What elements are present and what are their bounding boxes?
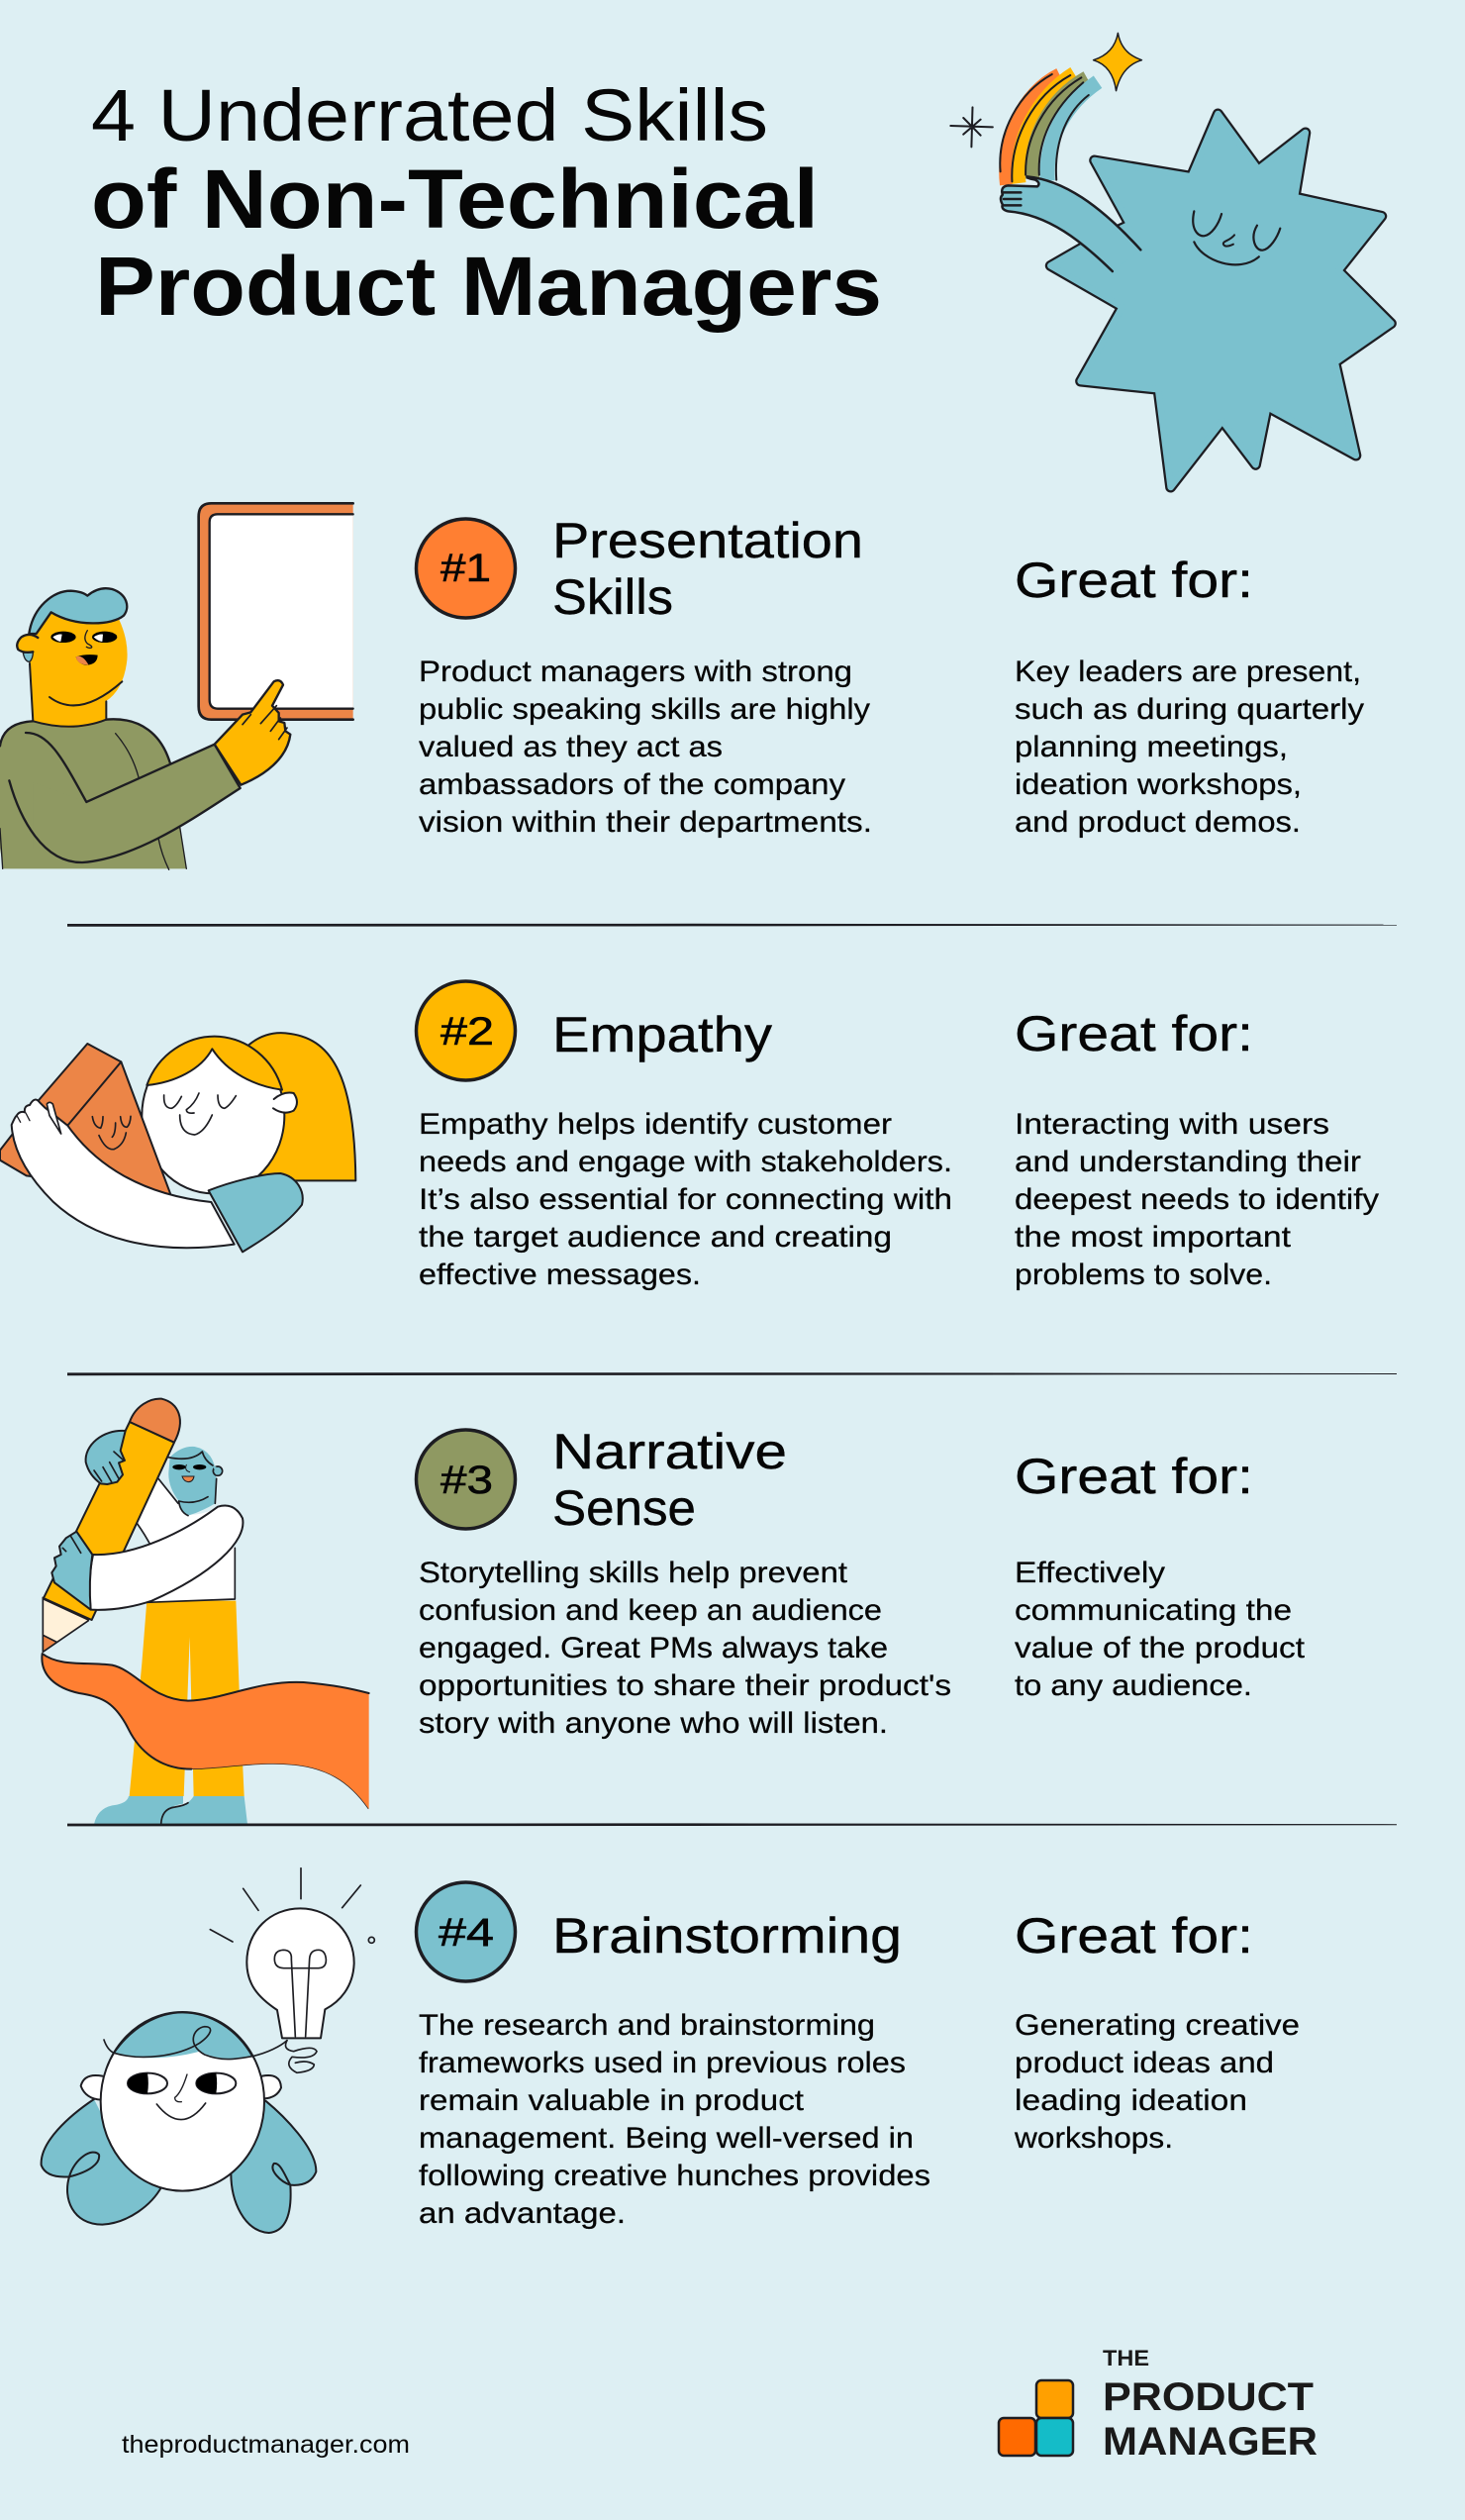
body: narrative sense: story with anyone who will listen. xyxy=(419,1707,888,1740)
body: empathy xyxy=(419,1108,952,1291)
body: brainstorming xyxy=(419,2009,930,2230)
body: brainstorming: an advantage. xyxy=(419,2197,626,2230)
body: presentation skills: Product managers with strong xyxy=(419,655,852,688)
heading: Presentation Skills: Skills xyxy=(552,569,673,625)
body: presentation skills: valued as they act as xyxy=(419,731,723,763)
logo wordmark: PRODUCT xyxy=(1103,2375,1314,2419)
heading: Presentation Skills: Presentation xyxy=(552,513,863,568)
logo wordmark xyxy=(1103,2346,1318,2464)
body: great for 2: and understanding their xyxy=(1015,1146,1361,1178)
heading: Brainstorming: Brainstorming xyxy=(552,1908,902,1964)
body: great for 4: workshops. xyxy=(1014,2122,1173,2155)
logo: The Product Manager xyxy=(999,2346,1318,2464)
heading: Great for 4: Great for: xyxy=(1015,1908,1253,1964)
body: great for 2: deepest needs to identify xyxy=(1015,1183,1379,1216)
logo wordmark: THE xyxy=(1103,2346,1149,2370)
badge 2: #2 xyxy=(440,1010,494,1054)
illustration: person with a light bulb idea xyxy=(42,1868,374,2233)
body: great for 4: Generating creative xyxy=(1015,2009,1300,2042)
heading: Narrative Sense xyxy=(552,1424,787,1536)
body: great for 4: leading ideation xyxy=(1015,2084,1247,2117)
title: 4 Underrated Skills xyxy=(91,74,768,156)
heading: Great for 3: Great for: xyxy=(1015,1449,1253,1504)
body: great for 2: problems to solve. xyxy=(1015,1259,1272,1291)
logo mark: three squares xyxy=(999,2380,1073,2456)
body: great for 1: ideation workshops, xyxy=(1015,768,1302,801)
body: great for 1: planning meetings, xyxy=(1015,731,1288,763)
body: great for 1: such as during quarterly xyxy=(1015,693,1364,726)
body: great for 2: the most important xyxy=(1015,1221,1292,1254)
logo wordmark: MANAGER xyxy=(1103,2420,1318,2464)
body: great for 4 xyxy=(1014,2009,1300,2155)
section 1 text xyxy=(416,513,1364,839)
badge 3 xyxy=(416,1430,515,1529)
illustration: person pointing at a board xyxy=(0,503,353,869)
body: empathy: the target audience and creating xyxy=(419,1221,892,1254)
body: great for 3: value of the product xyxy=(1015,1632,1306,1664)
badge 4 xyxy=(416,1882,515,1981)
badge 1 xyxy=(416,519,515,618)
body: great for 1: and product demos. xyxy=(1015,806,1301,839)
heading: Presentation Skills xyxy=(552,513,863,625)
body: great for 4: product ideas and xyxy=(1015,2047,1274,2079)
badge 1: #1 xyxy=(440,547,491,590)
section 3 text xyxy=(416,1424,1306,1740)
section 4 text xyxy=(416,1882,1300,2230)
body: empathy: It’s also essential for connecting with xyxy=(419,1183,952,1216)
body: great for 3 xyxy=(1015,1557,1306,1702)
heading: Narrative Sense: Narrative xyxy=(552,1424,787,1479)
body: narrative sense: opportunities to share their product's xyxy=(419,1669,951,1702)
illustration: person holding a giant pencil xyxy=(42,1399,369,1824)
body: great for 3: to any audience. xyxy=(1015,1669,1252,1702)
heading: Narrative Sense: Sense xyxy=(552,1480,696,1536)
badge 2 xyxy=(416,981,515,1080)
body: empathy: needs and engage with stakeholders. xyxy=(419,1146,952,1178)
illustration: smiling star holding a rainbow xyxy=(950,33,1391,487)
badge 3: #3 xyxy=(440,1459,493,1502)
body: great for 2: Interacting with users xyxy=(1015,1108,1329,1141)
section 2 text xyxy=(416,981,1379,1291)
body: empathy: effective messages. xyxy=(419,1259,701,1291)
illustration: person hugging a box xyxy=(0,1033,355,1252)
body: great for 1 xyxy=(1015,655,1364,839)
body: great for 3: Effectively xyxy=(1015,1557,1165,1589)
body: narrative sense: confusion and keep an audience xyxy=(419,1594,882,1627)
body: brainstorming: The research and brainstorming xyxy=(419,2009,875,2042)
body: presentation skills xyxy=(419,655,872,839)
body: brainstorming: frameworks used in previous roles xyxy=(419,2047,906,2079)
body: presentation skills: vision within their departments. xyxy=(419,806,872,839)
body: brainstorming: following creative hunches provides xyxy=(419,2160,930,2192)
badge 4: #4 xyxy=(439,1911,494,1955)
body: great for 3: communicating the xyxy=(1015,1594,1292,1627)
title: Product Managers xyxy=(95,240,882,333)
body: narrative sense xyxy=(419,1557,951,1740)
body: brainstorming: management. Being well-versed in xyxy=(419,2122,914,2155)
title: of Non-Technical xyxy=(91,152,819,246)
body: great for 2 xyxy=(1015,1108,1379,1291)
body: narrative sense: Storytelling skills help prevent xyxy=(419,1557,848,1589)
body: empathy: Empathy helps identify customer xyxy=(419,1108,892,1141)
body: presentation skills: public speaking skills are highly xyxy=(419,693,870,726)
body: great for 1: Key leaders are present, xyxy=(1015,655,1361,688)
body: narrative sense: engaged. Great PMs always take xyxy=(419,1632,888,1664)
title xyxy=(91,74,882,333)
body: brainstorming: remain valuable in product xyxy=(419,2084,805,2117)
footer url: theproductmanager.com xyxy=(122,2431,410,2459)
heading: Great for 1: Great for: xyxy=(1015,553,1253,608)
heading: Great for 2: Great for: xyxy=(1015,1006,1253,1061)
heading: Empathy: Empathy xyxy=(552,1007,772,1062)
body: presentation skills: ambassadors of the company xyxy=(419,768,845,801)
